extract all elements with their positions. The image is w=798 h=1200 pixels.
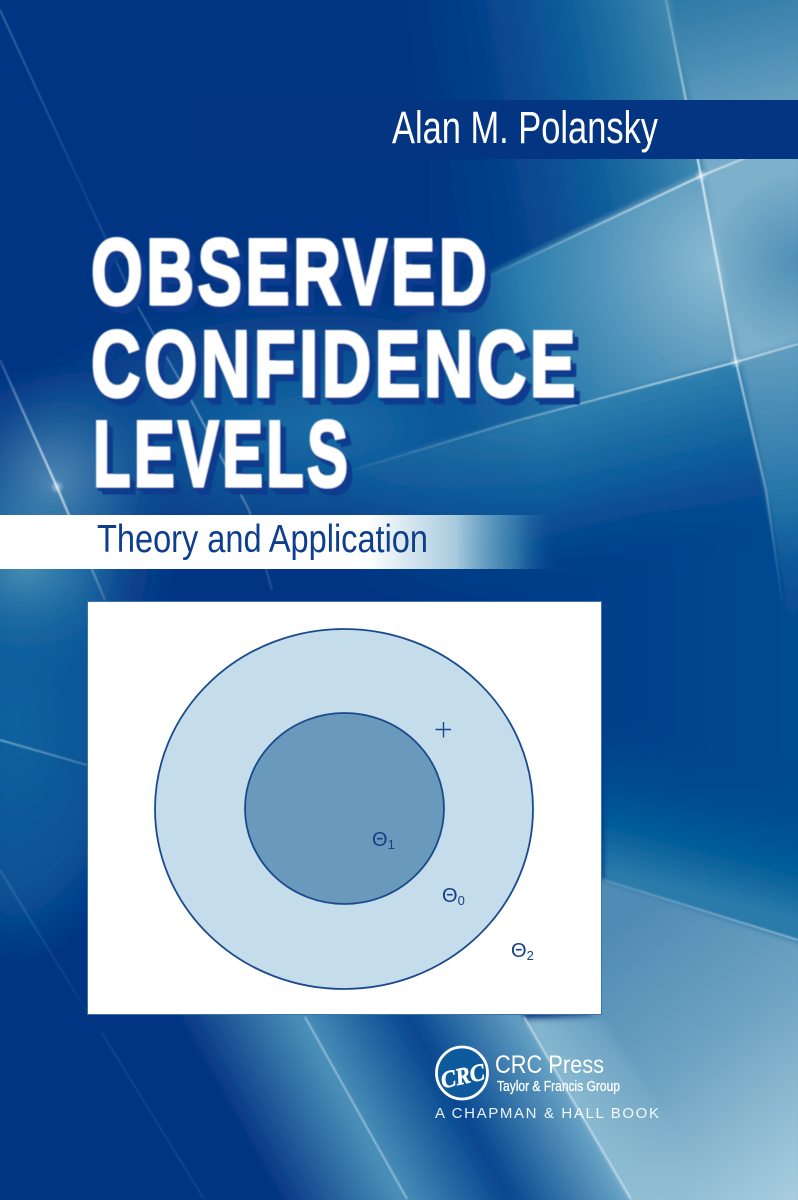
title shadow: LEVELS [95, 404, 353, 510]
title shadow: CONFIDENCE [93, 314, 581, 420]
label: theta 0: 0 [458, 893, 465, 908]
plus marker [436, 722, 451, 738]
subtitle: Theory and Application [97, 518, 428, 561]
inner region [245, 713, 444, 904]
imprint: A CHAPMAN & HALL BOOK [435, 1105, 659, 1122]
title [91, 219, 585, 513]
publisher name: CRC Press [495, 1051, 604, 1079]
title text [91, 219, 579, 506]
icon: CRC roundel: CRC [439, 1059, 488, 1094]
publisher group: Taylor & Francis Group [497, 1079, 620, 1095]
publisher logo [435, 1047, 659, 1122]
author band [200, 100, 798, 159]
title text: OBSERVED [91, 219, 490, 324]
label: theta 2: Θ [511, 940, 527, 962]
title text: LEVELS [93, 401, 351, 506]
panel: diagram [88, 602, 602, 1014]
title shadow [93, 222, 585, 513]
label: theta 1: 1 [388, 837, 395, 852]
subtitle band [0, 515, 555, 569]
outer region [155, 629, 533, 989]
author name: Alan M. Polansky [392, 102, 658, 153]
icon: CRC roundel [436, 1047, 488, 1099]
title text: CONFIDENCE [91, 311, 579, 416]
label: theta 1: Θ [372, 829, 388, 851]
label: theta 0: Θ [442, 885, 458, 907]
title shadow: OBSERVED [97, 226, 496, 331]
star highlights [50, 169, 743, 494]
label: theta 2: 2 [527, 948, 534, 963]
title shadow: LEVELS [99, 408, 357, 513]
title shadow: CONFIDENCE [97, 318, 585, 423]
title shadow: OBSERVED [93, 222, 492, 328]
